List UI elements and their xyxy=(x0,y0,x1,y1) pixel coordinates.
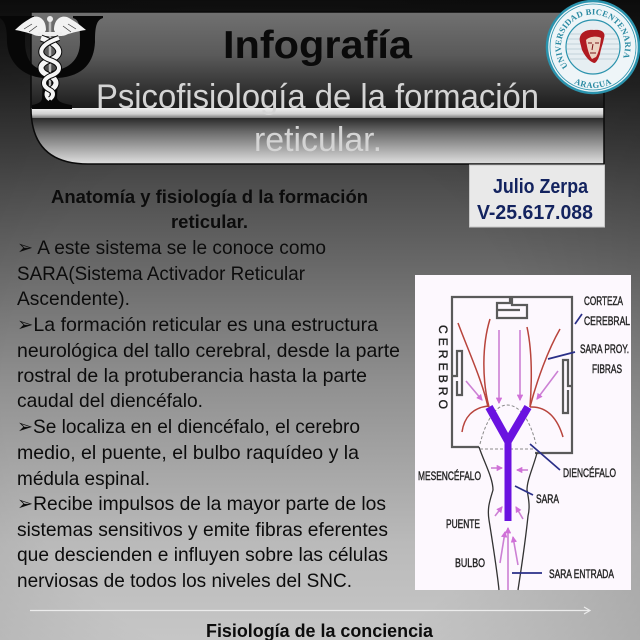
icon: university seal: ARAGUA xyxy=(574,79,612,88)
diagram labels: DIENCÉFALO xyxy=(563,465,616,480)
panel: author: V-25.617.088 xyxy=(477,202,593,224)
text block: body bullets: sistemas sensitivos y emite fibras eferentes xyxy=(17,519,388,541)
text block: body bullets: neurológica del tallo cerebral, desde la parte xyxy=(17,340,400,362)
diagram labels: CEREBRO xyxy=(436,325,450,409)
icon: university seal: UNIVERSIDAD BICENTENARIA xyxy=(555,9,631,70)
diagram labels: PUENTE xyxy=(446,517,480,531)
diagram labels: BULBO xyxy=(455,556,485,570)
brainstem outline xyxy=(479,447,537,590)
panel: author: Julio Zerpa xyxy=(493,176,589,198)
text block: body bullets: ➢ A este sistema se le conoce como xyxy=(17,237,326,259)
diagram labels: SARA xyxy=(536,492,559,506)
text block: body bullets: caudal del diencéfalo. xyxy=(17,390,203,412)
blue leader lines xyxy=(512,314,582,573)
heading: anatomy: reticular. xyxy=(171,211,248,232)
heading: anatomy xyxy=(51,186,368,232)
brain outline xyxy=(452,297,572,453)
diagram labels xyxy=(418,294,630,581)
diagram labels: CORTEZA xyxy=(584,294,623,308)
icon: caduceus xyxy=(15,16,86,100)
dashed thalamus xyxy=(480,405,536,449)
text block: body bullets: que descienden e influyen sobre las células xyxy=(17,544,388,566)
subtitle: Psicofisiología de la formación xyxy=(96,78,539,116)
text block: body bullets: ➢Recibe impulsos de la mayor parte de los xyxy=(17,493,386,515)
panel: author xyxy=(470,165,604,227)
pink arrows xyxy=(466,330,558,590)
title: Infografía xyxy=(223,24,412,67)
subtitle xyxy=(96,78,539,159)
heading: anatomy: Anatomía y fisiología d la formación xyxy=(51,186,368,207)
red projection fibres xyxy=(458,319,563,437)
diagram labels: FIBRAS xyxy=(592,362,622,376)
text block: body bullets: Ascendente). xyxy=(17,288,130,310)
text block: body bullets: SARA(Sistema Activador Reticular xyxy=(17,263,305,285)
text block: body bullets: ➢Se localiza en el diencéfalo, el cerebro xyxy=(17,416,360,438)
panel: header banner xyxy=(31,12,604,164)
chart: reticular formation diagram xyxy=(415,275,631,590)
text block: body bullets xyxy=(17,237,400,592)
icon: psi symbol xyxy=(0,16,103,109)
diagram labels: MESENCÉFALO xyxy=(418,468,481,483)
text block: body bullets: nerviosas de todos los niveles del SNC. xyxy=(17,570,352,592)
text block: body bullets: rostral de la protuberancia hasta la parte xyxy=(17,365,367,387)
arrow xyxy=(30,607,590,614)
text block: body bullets: médula espinal. xyxy=(17,468,150,490)
text block: body bullets: ➢La formación reticular es una estructura xyxy=(17,314,378,336)
purple Y pathway xyxy=(489,407,528,521)
icon: university seal xyxy=(546,0,640,94)
text block: body bullets: medio, el puente, el bulbo raquídeo y la xyxy=(17,442,359,464)
subtitle: reticular. xyxy=(254,121,382,159)
diagram labels: SARA ENTRADA xyxy=(549,567,614,581)
